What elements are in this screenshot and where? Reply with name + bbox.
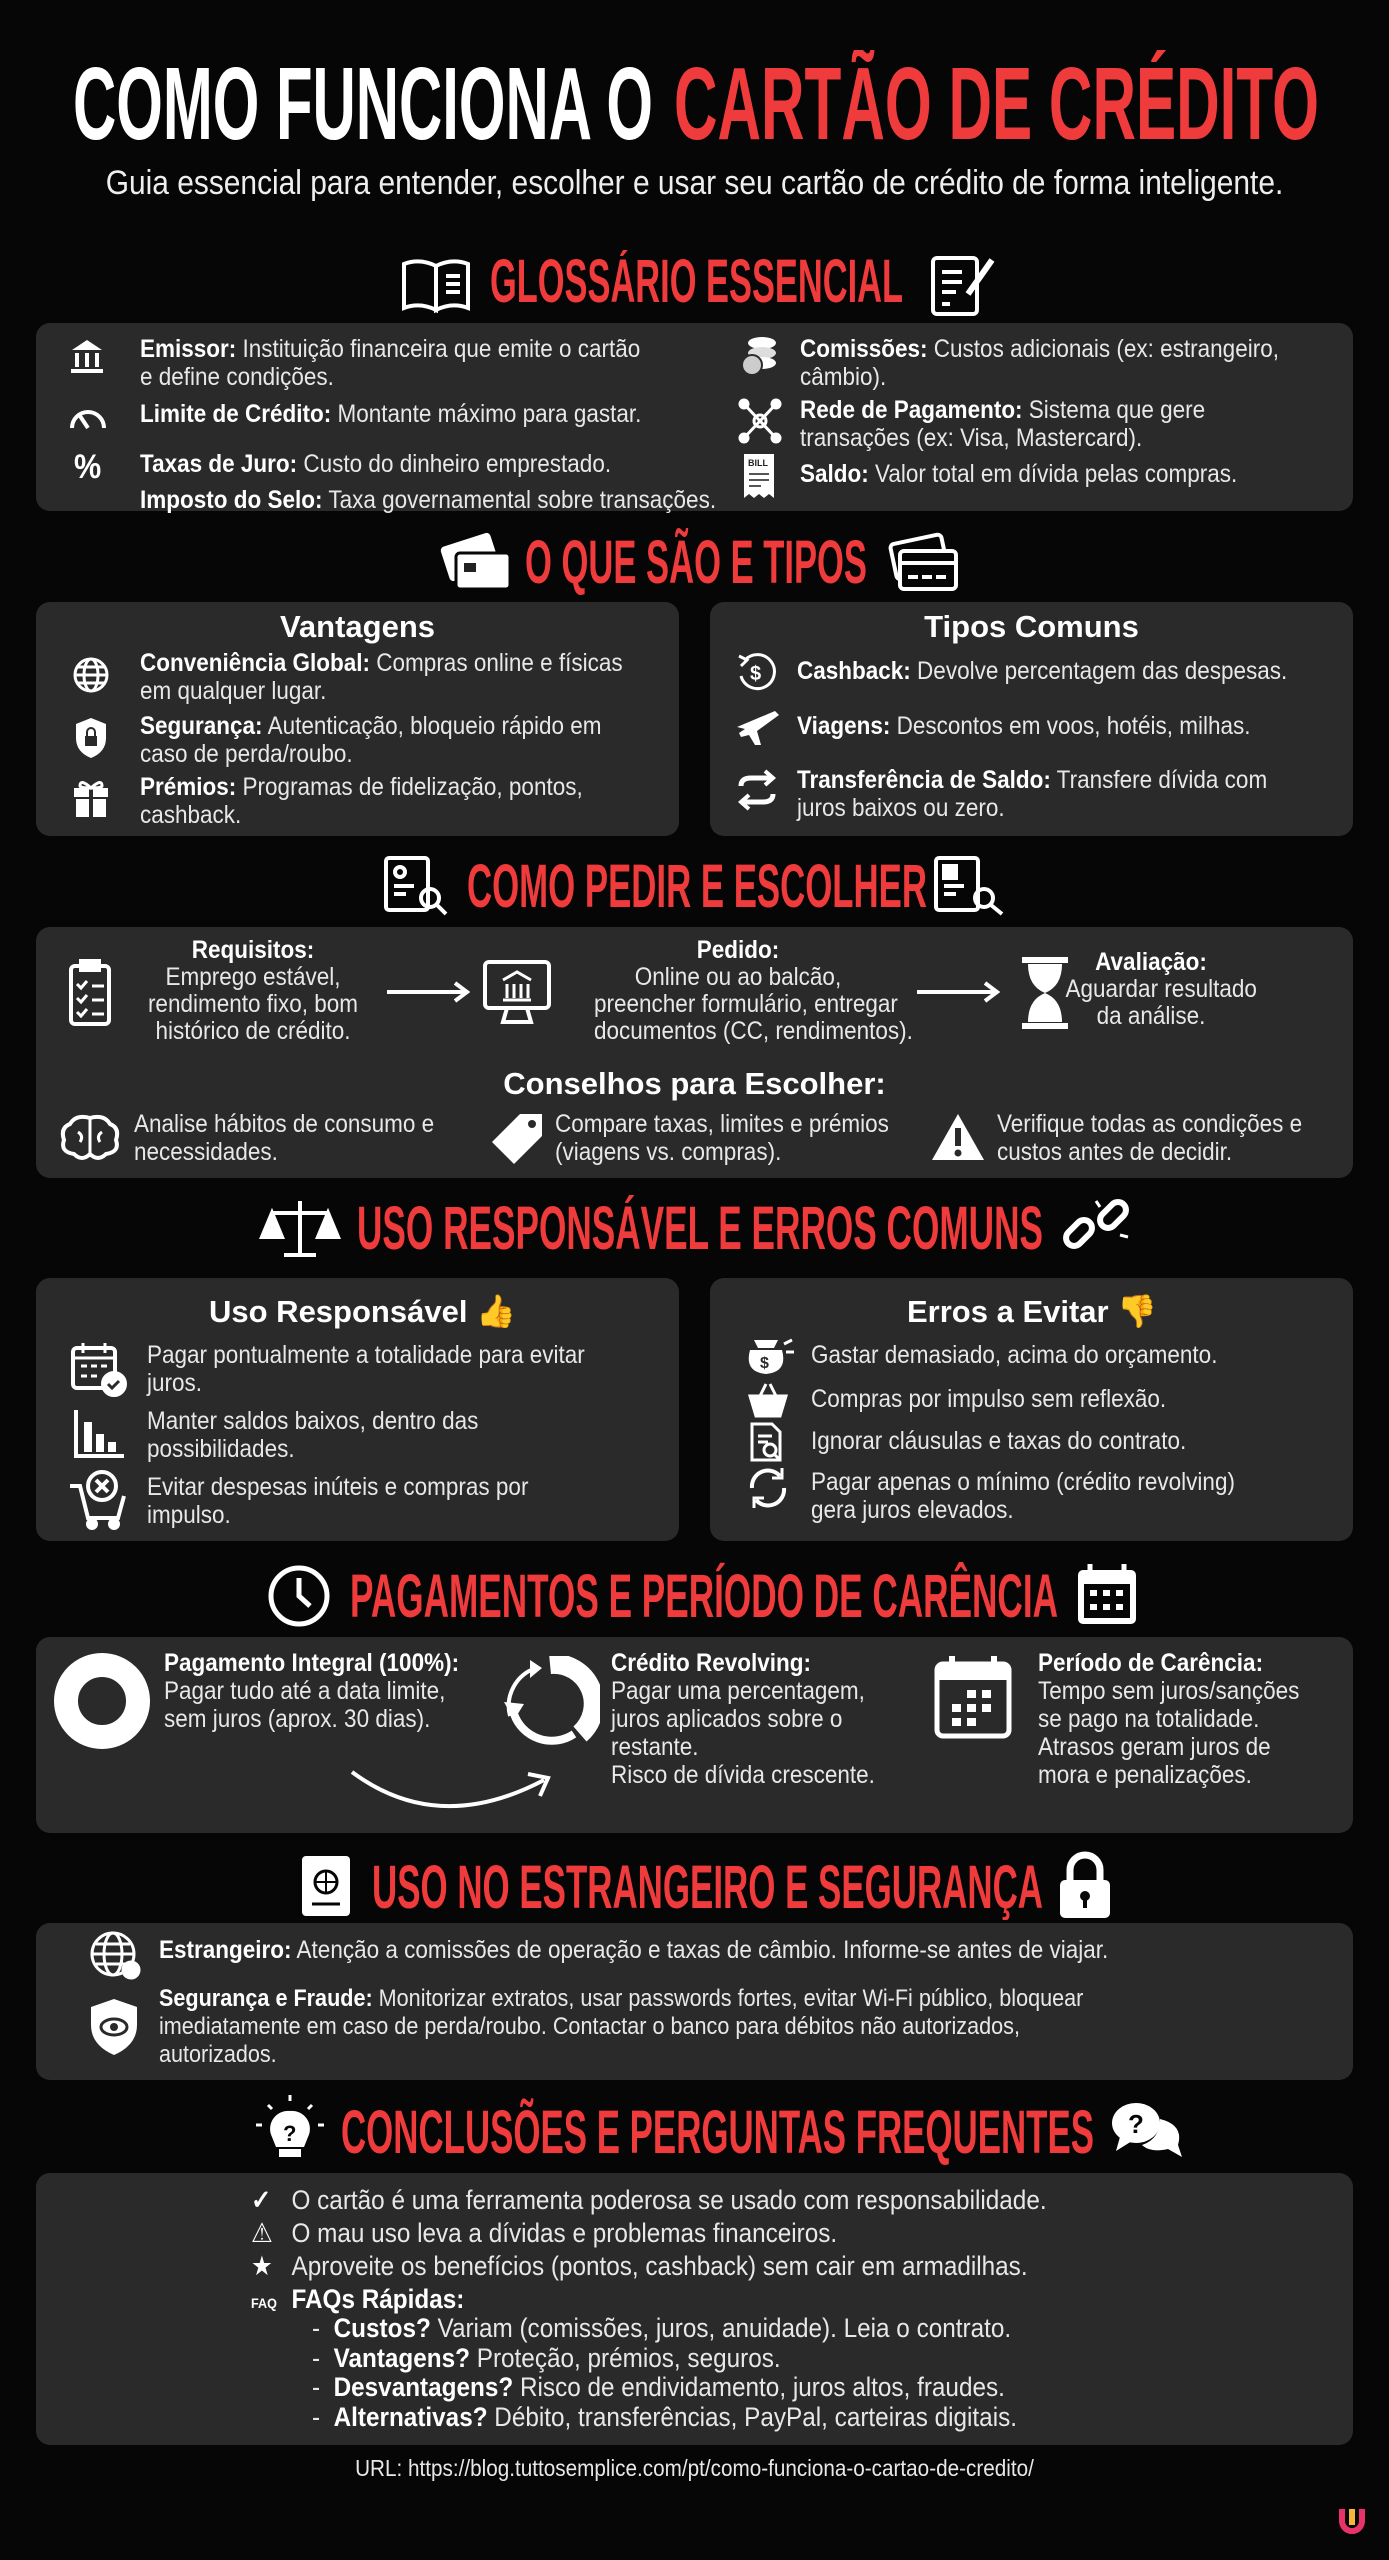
text: faqs: - Custos? Variam (comissões, juros, anuidade). Leia o contrato. bbox=[312, 2313, 1011, 2343]
text: conclusões list: ★ bbox=[251, 2251, 273, 2281]
text: período de carência: mora e penalizações. bbox=[1038, 1761, 1252, 1789]
text: comissões: Comissões: Custos adicionais (ex: estrangeiro, bbox=[800, 335, 1279, 363]
text: evitar despesas bbox=[147, 1473, 528, 1529]
icon: transfer bbox=[738, 770, 776, 810]
text: conclusões list: O mau uso leva a dívidas e problemas financeiros. bbox=[292, 2218, 837, 2248]
icon: lightbulb: ? bbox=[283, 2121, 296, 2146]
icon: bar chart bbox=[72, 1408, 126, 1460]
icon: card stack bbox=[890, 534, 956, 589]
text: segurança bbox=[140, 712, 602, 768]
icon: coins bbox=[743, 337, 776, 374]
icon: money bag bbox=[744, 1336, 794, 1376]
text: pedido: Online ou ao balcão, bbox=[635, 963, 841, 991]
text: requisitos: Emprego estável, bbox=[165, 963, 341, 991]
text: segurança e fraude: Segurança e Fraude: Monitorizar extratos, usar passwords fortes, evitar Wi-Fi público, bloquear bbox=[159, 1985, 1083, 2012]
icon: globe bbox=[74, 658, 108, 692]
icon: calendar check bbox=[70, 1340, 128, 1398]
text: conclusões list: ✓ bbox=[251, 2185, 271, 2215]
text: pedido bbox=[594, 936, 913, 1045]
icon: chat question bbox=[1112, 2103, 1182, 2157]
icon: cards bbox=[440, 532, 510, 589]
text: conselho 3: Verifique todas as condições e bbox=[997, 1110, 1302, 1138]
text: segurança: Segurança: Autenticação, bloqueio rápido em bbox=[140, 712, 602, 740]
text: estrangeiro: Estrangeiro: Atenção a comissões de operação e taxas de câmbio. Informe-se antes de viajar. bbox=[159, 1936, 1108, 1964]
panel: conclusões bbox=[36, 2173, 1353, 2445]
icon: shield eye bbox=[89, 1997, 139, 2057]
text: conclusões list: FAQ bbox=[251, 2295, 277, 2311]
panel: uso responsável bbox=[36, 1278, 679, 1541]
text: conclusões list: FAQs Rápidas: bbox=[292, 2284, 464, 2314]
text: transferência: Transferência de Saldo: Transfere dívida com bbox=[797, 766, 1267, 794]
text: conselho 3 bbox=[997, 1110, 1302, 1166]
panel: erros a evitar bbox=[710, 1278, 1353, 1541]
text: conclusões list bbox=[251, 2184, 1047, 2320]
icon: bank bbox=[71, 340, 103, 373]
icon: bill bbox=[744, 454, 774, 498]
text: emissor: Emissor: Instituição financeira que emite o cartão bbox=[140, 335, 640, 363]
panel: como pedir bbox=[36, 927, 1353, 1178]
text: conveniência bbox=[140, 649, 623, 705]
text: evitar despesas: Evitar despesas inúteis e compras por bbox=[147, 1473, 528, 1501]
text: crédito revolving bbox=[611, 1649, 875, 1789]
text: pagamento integral: Pagar tudo até a data limite, bbox=[164, 1677, 445, 1705]
text: faqs: - Alternativas? Débito, transferências, PayPal, carteiras digitais. bbox=[312, 2402, 1017, 2432]
text: imposto: Imposto do Selo: Taxa governamental sobre transações. bbox=[140, 486, 716, 514]
text: emissor bbox=[140, 335, 640, 391]
text: requisitos: histórico de crédito. bbox=[155, 1017, 351, 1045]
text: pagamento integral: sem juros (aprox. 30 dias). bbox=[164, 1705, 430, 1733]
text: avaliação: Avaliação: bbox=[1095, 948, 1207, 976]
text: viagens: Viagens: Descontos em voos, hotéis, milhas. bbox=[797, 712, 1251, 740]
text: faqs bbox=[312, 2314, 1017, 2432]
text: requisitos: Requisitos: bbox=[192, 936, 314, 964]
icon: basket bbox=[748, 1382, 788, 1418]
icon: cart x bbox=[68, 1468, 128, 1530]
text: saldo: Saldo: Valor total em dívida pelas compras. bbox=[800, 460, 1237, 488]
text: requisitos bbox=[148, 936, 358, 1045]
icon: refresh bbox=[746, 1466, 790, 1510]
icon: document search bbox=[936, 858, 1002, 914]
text: pagamento integral: Pagamento Integral (100%): bbox=[164, 1649, 459, 1677]
icon: doc search bbox=[748, 1422, 788, 1464]
icon: tag bbox=[492, 1114, 542, 1164]
text: comissões bbox=[800, 335, 1279, 391]
text: crédito revolving: restante. bbox=[611, 1733, 699, 1761]
text: conclusões list: O cartão é uma ferramenta poderosa se usado com responsabilidade. bbox=[292, 2185, 1047, 2215]
icon: money bag: $ bbox=[760, 1355, 769, 1372]
text: pagamento integral bbox=[164, 1649, 459, 1733]
text: avaliação bbox=[1066, 948, 1257, 1030]
icon: profile search bbox=[386, 858, 446, 914]
icon: network bbox=[738, 398, 782, 444]
text: crédito revolving: Risco de dívida crescente. bbox=[611, 1761, 875, 1789]
subheading: conselhos: Conselhos para Escolher: bbox=[503, 1066, 886, 1101]
icon: chat question: ? bbox=[1128, 2109, 1144, 2139]
text: requisitos: rendimento fixo, bom bbox=[148, 990, 358, 1018]
arrow: curved bbox=[348, 1766, 562, 1814]
text: saldos baixos: possibilidades. bbox=[147, 1435, 295, 1463]
panel: estrangeiro bbox=[36, 1923, 1353, 2080]
icon: gift bbox=[74, 781, 108, 817]
text: pagar pontualmente bbox=[147, 1341, 585, 1397]
heading: como pedir bbox=[384, 852, 1004, 920]
text: período de carência: Tempo sem juros/sanções bbox=[1038, 1677, 1299, 1705]
text: conselho 3: custos antes de decidir. bbox=[997, 1138, 1232, 1166]
icon: lightbulb bbox=[256, 2095, 324, 2157]
text: conselho 2: Compare taxas, limites e prémios bbox=[555, 1110, 889, 1138]
text: segurança: caso de perda/roubo. bbox=[140, 740, 353, 768]
icon: calendar bbox=[934, 1654, 1012, 1740]
icon: passport bbox=[302, 1856, 350, 1916]
text: taxas: Taxas de Juro: Custo do dinheiro emprestado. bbox=[140, 450, 611, 478]
subheading: erros: Erros a Evitar 👎 bbox=[907, 1293, 1157, 1329]
icon: scales bbox=[262, 1201, 338, 1255]
text: segurança e fraude: autorizados. bbox=[159, 2041, 277, 2068]
heading: o que são: O QUE SÃO E TIPOS bbox=[525, 528, 867, 595]
icon: revolving bbox=[500, 1656, 600, 1750]
logo bbox=[1338, 2505, 1366, 2535]
text: crédito revolving: Crédito Revolving: bbox=[611, 1649, 811, 1677]
text: pedido: Pedido: bbox=[697, 936, 779, 964]
text: compras impulso: Compras por impulso sem reflexão. bbox=[811, 1385, 1166, 1413]
text: conveniência: Conveniência Global: Compras online e físicas bbox=[140, 649, 623, 677]
subheading: vantagens: Vantagens bbox=[280, 609, 435, 644]
text: faqs: - Desvantagens? Risco de endividamento, juros altos, fraudes. bbox=[312, 2372, 1005, 2402]
subtitle: Guia essencial para entender, escolher e usar seu cartão de crédito de forma inteligente. bbox=[106, 164, 1283, 202]
icon: gauge bbox=[70, 410, 106, 430]
panel: vantagens bbox=[36, 602, 679, 836]
icon: document pen bbox=[933, 258, 992, 314]
icon: hourglass bbox=[1022, 957, 1068, 1029]
text: conselho 1: necessidades. bbox=[134, 1138, 278, 1166]
text: período de carência: Período de Carência: bbox=[1038, 1649, 1263, 1677]
text: pedido: documentos (CC, rendimentos). bbox=[594, 1017, 913, 1045]
panel: glossário bbox=[36, 323, 1353, 511]
text: conselho 2 bbox=[555, 1110, 889, 1166]
heading: como pedir: COMO PEDIR E ESCOLHER bbox=[467, 852, 927, 920]
panel: pagamentos bbox=[36, 1637, 1353, 1833]
text: segurança e fraude bbox=[159, 1985, 1083, 2069]
text: conselho 1: Analise hábitos de consumo e bbox=[134, 1110, 434, 1138]
arrow bbox=[387, 981, 470, 1003]
text: rede bbox=[800, 396, 1205, 452]
text: gastar demasiado: Gastar demasiado, acima do orçamento. bbox=[811, 1341, 1217, 1369]
subheading: tipos comuns: Tipos Comuns bbox=[924, 609, 1139, 644]
icon: broken chain bbox=[1063, 1199, 1129, 1249]
icon: padlock bbox=[1060, 1855, 1110, 1918]
icon: clock bbox=[271, 1568, 327, 1624]
icon: bill: BILL bbox=[748, 458, 768, 468]
text: avaliação: da análise. bbox=[1097, 1002, 1205, 1030]
text: conclusões list: ⚠ bbox=[251, 2218, 273, 2248]
panel: tipos comuns bbox=[710, 602, 1353, 836]
text: período de carência: Atrasos geram juros de bbox=[1038, 1733, 1271, 1761]
text: limite: Limite de Crédito: Montante máximo para gastar. bbox=[140, 400, 641, 428]
text: pagar pontualmente: juros. bbox=[147, 1369, 202, 1397]
text: período de carência bbox=[1038, 1649, 1299, 1789]
text: pagar mínimo: gera juros elevados. bbox=[811, 1496, 1014, 1524]
subheading: uso responsável: Uso Responsável 👍 bbox=[209, 1293, 516, 1329]
text: crédito revolving: juros aplicados sobre o bbox=[611, 1705, 842, 1733]
icon: warning bbox=[930, 1112, 986, 1162]
heading: o que são bbox=[440, 528, 958, 595]
text: crédito revolving: Pagar uma percentagem, bbox=[611, 1677, 865, 1705]
text: conclusões list: Aproveite os benefícios (pontos, cashback) sem cair em armadilhas. bbox=[292, 2251, 1028, 2281]
text: saldos baixos bbox=[147, 1407, 478, 1463]
text: transferência bbox=[796, 766, 1267, 822]
icon: book bbox=[404, 261, 468, 310]
text: pedido: preencher formulário, entregar bbox=[594, 990, 898, 1018]
text: ignorar cláusulas: Ignorar cláusulas e taxas do contrato. bbox=[811, 1427, 1186, 1455]
text: segurança e fraude: imediatamente em caso de perda/roubo. Contactar o banco para débitos não autorizados, bbox=[159, 2013, 1020, 2040]
text: cashback: Cashback: Devolve percentagem das despesas. bbox=[797, 657, 1287, 685]
text: rede: transações (ex: Visa, Mastercard). bbox=[800, 424, 1142, 452]
text: saldos baixos: Manter saldos baixos, dentro das bbox=[147, 1407, 478, 1435]
icon: cashback: $ bbox=[750, 663, 761, 685]
text: conveniência: em qualquer lugar. bbox=[140, 677, 326, 705]
text: pagar pontualmente: Pagar pontualmente a totalidade para evitar bbox=[147, 1341, 585, 1369]
text: comissões: câmbio). bbox=[800, 363, 886, 391]
url: URL: https://blog.tuttosemplice.com/pt/como-funciona-o-cartao-de-credito/ bbox=[355, 2455, 1034, 2481]
text: rede: Rede de Pagamento: Sistema que gere bbox=[800, 396, 1205, 424]
text: conselho 1 bbox=[134, 1110, 434, 1166]
text: avaliação: Aguardar resultado bbox=[1066, 975, 1257, 1003]
icon: monitor bbox=[483, 960, 551, 1024]
icon: plane bbox=[737, 711, 779, 745]
text: conselho 2: (viagens vs. compras). bbox=[555, 1138, 781, 1166]
text: prémios: Prémios: Programas de fidelização, pontos, bbox=[140, 773, 583, 801]
icon: shield lock bbox=[76, 718, 106, 758]
text: transferência: juros baixos ou zero. bbox=[797, 794, 1005, 822]
icon: percent: % bbox=[74, 448, 101, 486]
icon: calendar bbox=[1078, 1564, 1136, 1624]
text: faqs: - Vantagens? Proteção, prémios, seguros. bbox=[312, 2342, 781, 2372]
heading: glossário bbox=[402, 250, 994, 316]
text: pagar mínimo bbox=[811, 1468, 1235, 1524]
text: prémios: cashback. bbox=[140, 801, 241, 829]
text: prémios bbox=[140, 773, 583, 829]
icon: full ring bbox=[53, 1652, 151, 1750]
icon: cashback bbox=[738, 653, 776, 690]
text: período de carência: se pago na totalidade. bbox=[1038, 1705, 1259, 1733]
text: emissor: e define condições. bbox=[140, 363, 334, 391]
icon: globe card bbox=[89, 1930, 143, 1980]
text: pagar mínimo: Pagar apenas o mínimo (crédito revolving) bbox=[811, 1468, 1235, 1496]
text: evitar despesas: impulso. bbox=[147, 1501, 231, 1529]
icon: brain bbox=[60, 1114, 120, 1160]
arrow bbox=[917, 981, 1000, 1003]
icon: clipboard bbox=[69, 959, 111, 1026]
